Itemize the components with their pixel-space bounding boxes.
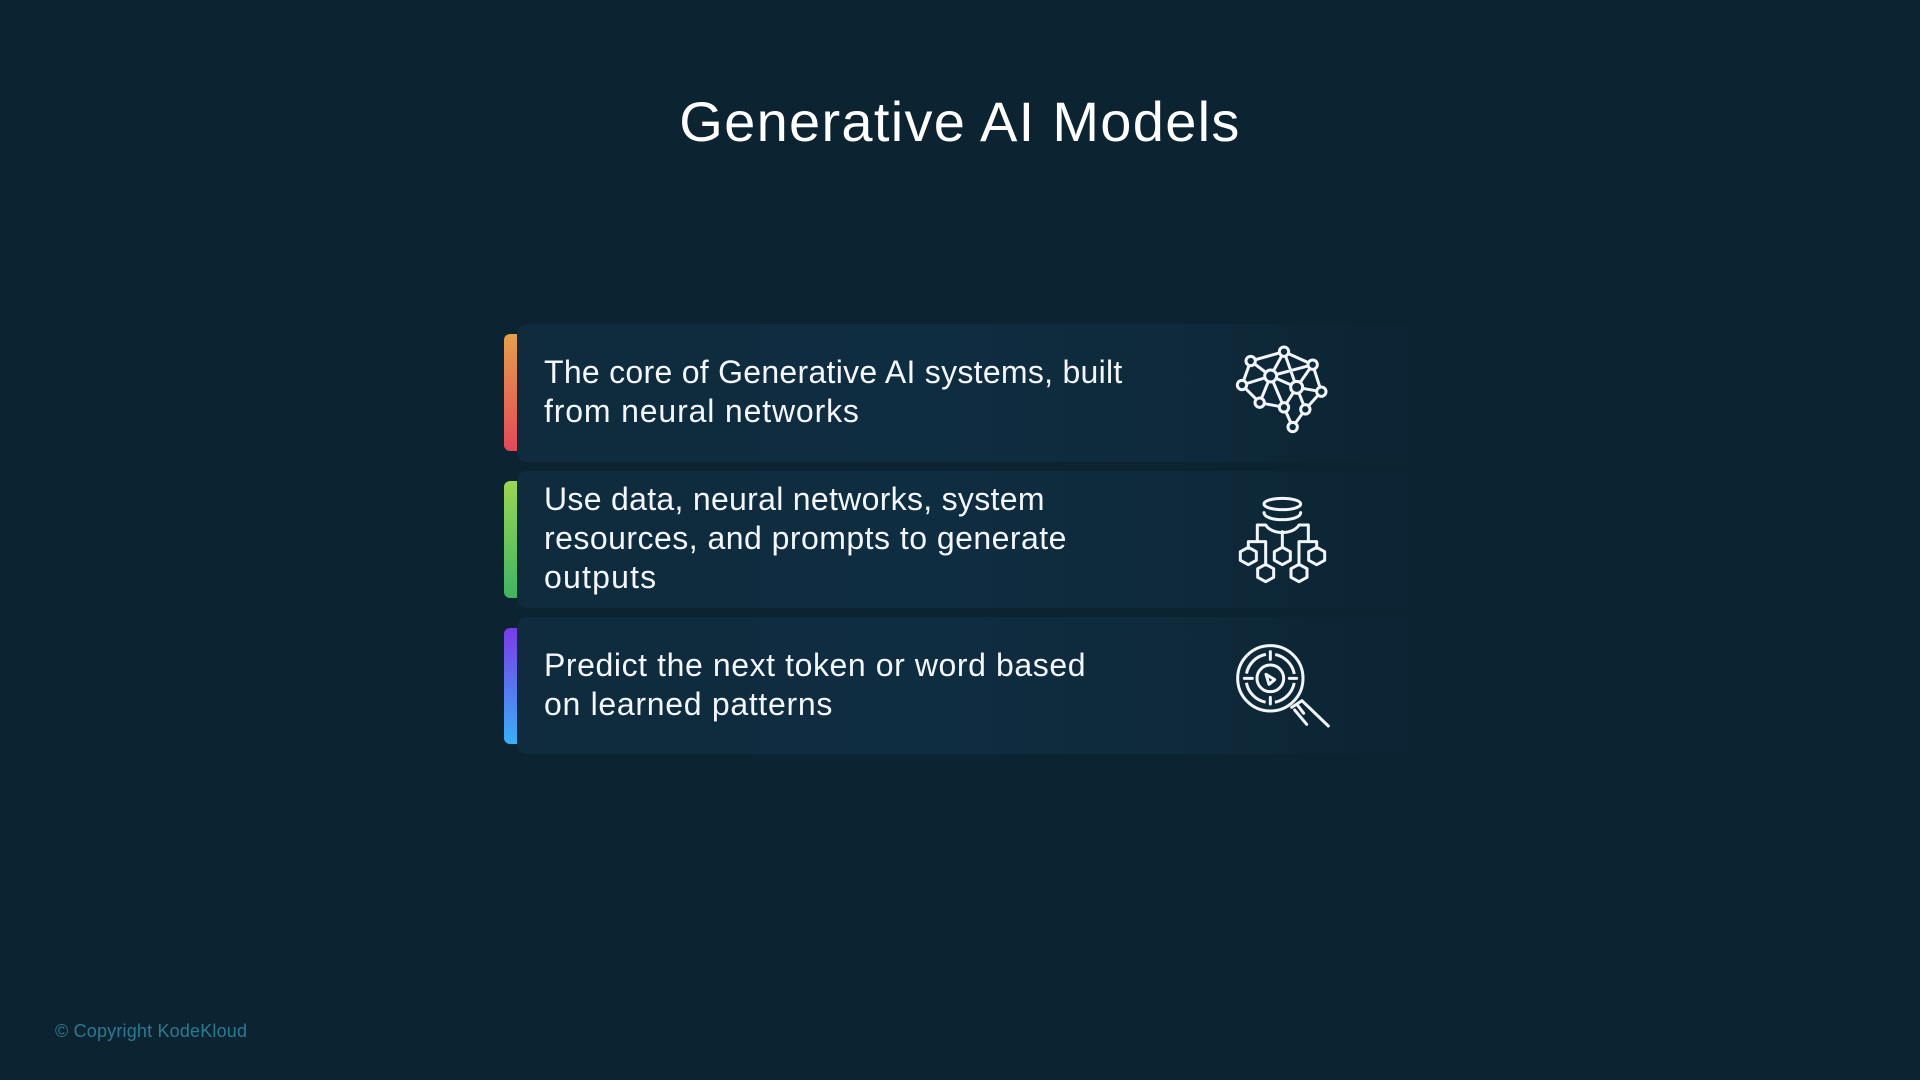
panel background	[517, 617, 1430, 754]
text: panel 3	[544, 647, 1086, 722]
panel: predict next token	[517, 617, 1231, 754]
text: panel 1: The core of Generative AI systems, built	[544, 354, 1123, 390]
panel: core of generative AI	[517, 324, 1231, 462]
panel background	[517, 324, 1430, 462]
text: panel 3: on learned patterns	[544, 686, 833, 722]
text: panel 2: Use data, neural networks, system	[544, 481, 1045, 517]
text: panel 1	[544, 354, 1123, 429]
text: panel 2: outputs	[544, 559, 657, 595]
title: Generative AI Models	[679, 90, 1241, 153]
accent bar: orange to red	[504, 334, 517, 451]
copyright: © Copyright KodeKloud	[55, 1021, 247, 1041]
panel background	[517, 471, 1430, 608]
accent bar: purple to blue	[504, 628, 517, 744]
text: panel 3: Predict the next token or word based	[544, 647, 1086, 683]
panel: how models work	[517, 471, 1231, 608]
text: panel 2	[544, 481, 1067, 595]
icon: magnifier target	[1236, 644, 1330, 728]
icon: database hierarchy	[1238, 496, 1326, 584]
icon: neural network brain	[1236, 346, 1328, 434]
text: panel 1: from neural networks	[544, 393, 860, 429]
accent bar: green	[504, 481, 517, 598]
text: panel 2: resources, and prompts to generate	[544, 520, 1067, 556]
